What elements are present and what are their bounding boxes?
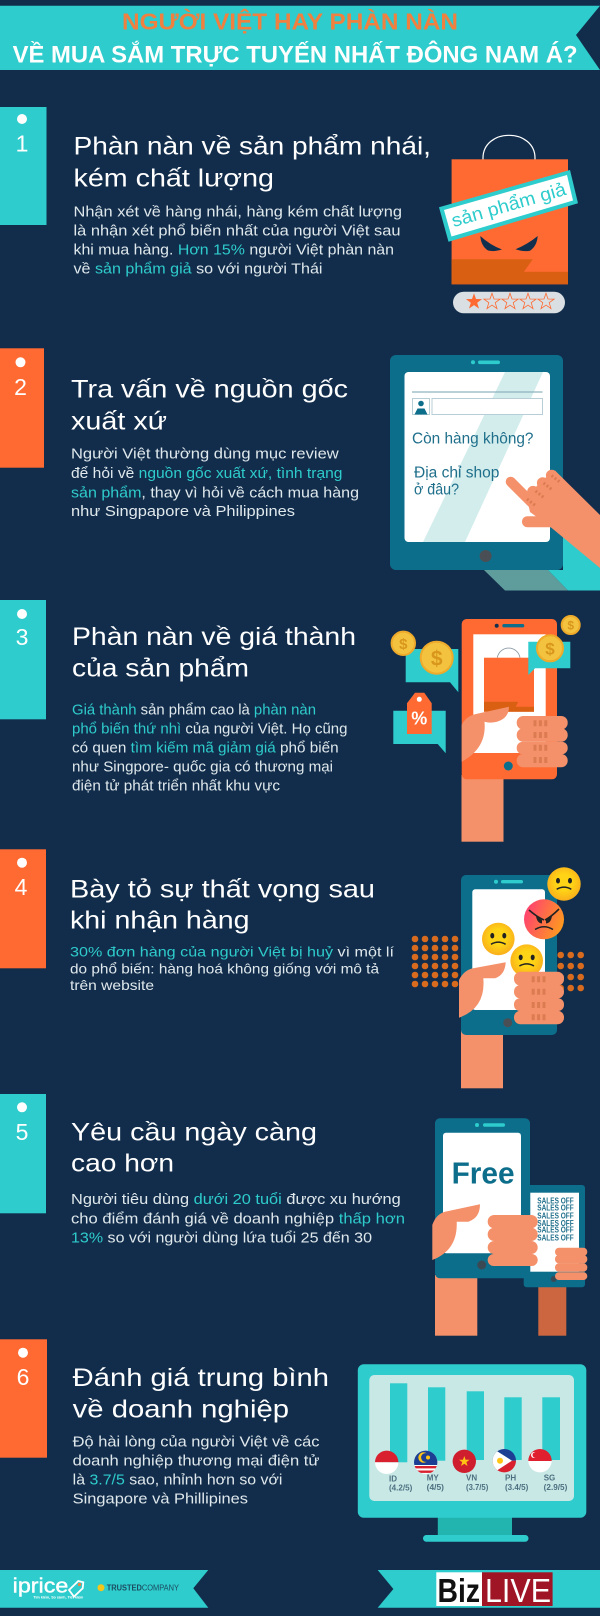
icon: two phones in hands: SALES OFF [537, 1211, 574, 1220]
logo: iprice: iprice [13, 1575, 68, 1597]
icon: phone in hand with coins and discount tag: $ [399, 636, 408, 653]
country labels: (3.4/5) [505, 1483, 529, 1492]
heading 5: Yêu cầu ngày càng [71, 1119, 317, 1147]
text block 2: sản phẩm , thay vì hỏi về cách mua hàng [71, 485, 359, 501]
heading 3: Phàn nàn về giá thành [72, 623, 356, 651]
icon: shopping bag with fake product label: sản phẩm giả [449, 178, 569, 231]
icon: two phones in hands: SALES OFF [537, 1219, 574, 1228]
country labels: (3.7/5) [466, 1483, 489, 1492]
number tab 3: 3 [16, 624, 28, 650]
number tab 5: 5 [16, 1119, 28, 1145]
logo: TrustedCompany: TRUSTEDCOMPANY [107, 1584, 180, 1593]
text block 6: là 3.7/5 sao, nhỉnh hơn so với [73, 1472, 282, 1488]
heading 1 [74, 133, 431, 193]
country labels [389, 1474, 568, 1493]
text block 6: Singapore và Phillipines [73, 1491, 248, 1507]
heading 6: Đánh giá trung bình [73, 1364, 329, 1392]
icon: two phones in hands: SALES OFF [537, 1204, 574, 1213]
heading 3: của sản phẩm [72, 655, 249, 683]
icon: tablet with hand: Địa chỉ shop [414, 465, 499, 482]
text block 6 [73, 1435, 320, 1507]
icon: phone in hand with sad faces [459, 867, 581, 1088]
text block 3: như Singpore- quốc gia có thương mại [72, 760, 333, 776]
footer ribbon right with BizLIVE logo: Biz [438, 1572, 480, 1609]
title line 2: VỀ MUA SẮM TRỰC TUYẾN NHẤT ĐÔNG NAM Á? [13, 41, 578, 69]
text block 1: về sản phẩm giả so với người Thái [74, 261, 322, 277]
text block 3: Giá thành sản phẩm cao là phàn nàn [72, 702, 316, 718]
flag: Vietnam [452, 1450, 476, 1473]
text block 5: 13% so với người dùng lứa tuổi 25 đến 30 [71, 1230, 372, 1246]
icon: two phones in hands: SALES OFF [537, 1226, 574, 1235]
country labels: (4/5) [427, 1483, 444, 1492]
panel: section 4 [0, 849, 584, 1088]
text block 6: doanh nghiệp thương mại điện tử [73, 1454, 320, 1470]
flag: Indonesia [374, 1450, 399, 1474]
panel: section 5 [0, 1094, 587, 1336]
icon: phone in hand with coins and discount tag: $ [545, 640, 555, 658]
icon: tablet with hand: ở đâu? [414, 481, 459, 498]
flag: Philippines [492, 1449, 516, 1472]
icon: phone in hand with coins and discount tag [392, 616, 580, 842]
text block 5: Người tiêu dùng dưới 20 tuổi được xu hướng [71, 1192, 401, 1208]
heading 4 [70, 875, 375, 934]
flag: Singapore [528, 1449, 552, 1473]
number tab 2: 2 [14, 374, 27, 400]
country labels: MY [427, 1474, 439, 1483]
text block 4: 30% đơn hàng của người Việt bị huỷ vì một lí [70, 944, 394, 960]
chart: monitor with ratings bar chart [358, 1364, 586, 1542]
text block 4 [70, 944, 394, 993]
footer ribbon right with BizLIVE logo: LIVE [485, 1572, 551, 1609]
text block 1: Nhận xét về hàng nhái, hàng kém chất lượng [74, 205, 402, 221]
country labels: VN [466, 1474, 477, 1483]
icon: tablet with hand: Còn hàng không? [412, 430, 534, 447]
number tab 1 [0, 107, 46, 225]
icon: two phones in hands: SALES OFF [537, 1196, 574, 1205]
flag: Malaysia [414, 1450, 438, 1474]
icon: phone in hand with coins and discount tag: % [411, 708, 427, 728]
heading 2: xuất xứ [71, 407, 167, 435]
text block 5 [71, 1192, 405, 1246]
heading 2 [71, 375, 348, 435]
icon: two phones in hands: SALES OFF [537, 1233, 574, 1242]
panel: section 6 [0, 1339, 586, 1542]
text block 2: để hỏi về nguồn gốc xuất xứ, tình trạng [71, 466, 342, 482]
text block 4: trên website [70, 977, 154, 993]
number tab 6: 6 [17, 1364, 29, 1390]
logo: iprice: Tìm kiếm, So sánh, Tiết kiệm [33, 1594, 84, 1599]
text block 1 [74, 205, 402, 277]
title line 1: NGƯỜI VIỆT HAY PHÀN NÀN [122, 7, 458, 34]
number tab 3 [0, 600, 46, 719]
country labels: (4.2/5) [389, 1484, 413, 1493]
heading 5 [71, 1119, 317, 1178]
panel: section 3 [0, 600, 580, 842]
icon: two phones in hands: Free [452, 1155, 515, 1190]
icon: orange dot grid right [557, 952, 584, 991]
text block 3: điện tử phát triển nhất khu vực [72, 779, 280, 795]
icon: one of five star rating [453, 292, 565, 313]
number tab 6 [0, 1339, 47, 1458]
heading 3 [72, 623, 356, 683]
icon: two phones in hands [432, 1118, 587, 1336]
text block 5: cho điểm đánh giá về doanh nghiệp thấp hơn [71, 1211, 405, 1227]
number tab 4 [0, 849, 46, 968]
header banner [0, 6, 600, 70]
text block 2 [71, 446, 359, 520]
text block 1: là nhận xét phổ biến nhất của người Việt sau [74, 223, 400, 239]
number tab 5 [0, 1094, 46, 1213]
heading 5: cao hơn [71, 1150, 174, 1178]
country labels: ID [389, 1475, 397, 1484]
heading 4: khi nhận hàng [70, 906, 249, 934]
icon: shopping bag with fake product label [439, 135, 578, 284]
country labels: SG [544, 1474, 555, 1483]
text block 1: khi mua hàng. Hơn 15% người Việt phàn nàn [74, 242, 394, 258]
panel: section 1 [0, 107, 578, 313]
icon: phone in hand with coins and discount tag: $ [567, 618, 574, 632]
text block 3: có quen tìm kiếm mã giảm giá phổ biến [72, 740, 339, 756]
number tab 1: 1 [16, 131, 28, 157]
number tab 4: 4 [15, 874, 28, 900]
icon: tablet with hand [390, 355, 600, 590]
text block 2: như Singpapore và Philippines [71, 504, 295, 520]
text block 2: Người Việt thường dùng mục review [71, 446, 339, 462]
number tab 2 [0, 348, 44, 468]
text block 3: phổ biến thứ nhì của người Việt. Họ cũng [72, 721, 348, 737]
footer ribbon right with BizLIVE logo [378, 1570, 600, 1609]
icon: phone in hand with coins and discount tag: $ [431, 648, 443, 670]
heading 2: Tra vấn về nguồn gốc [71, 375, 348, 403]
text block 3 [72, 702, 348, 795]
icon: orange dot grid left [412, 936, 458, 987]
heading 4: Bày tỏ sự thất vọng sau [70, 875, 375, 903]
country labels: (2.9/5) [544, 1483, 568, 1492]
text block 4: do phổ biến: hàng hoá không giống với mô tả [70, 960, 379, 976]
text block 6: Độ hài lòng của người Việt về các [73, 1435, 320, 1451]
heading 1: Phàn nàn về sản phẩm nhái, [74, 133, 431, 161]
heading 1: kém chất lượng [74, 165, 274, 193]
bars [390, 1383, 560, 1462]
logo: iprice [13, 1575, 84, 1599]
heading 6 [73, 1364, 329, 1423]
heading 6: về doanh nghiệp [73, 1395, 289, 1423]
country labels: PH [505, 1474, 516, 1483]
panel: section 2 [0, 348, 600, 590]
footer ribbon left with logos [0, 1570, 208, 1608]
